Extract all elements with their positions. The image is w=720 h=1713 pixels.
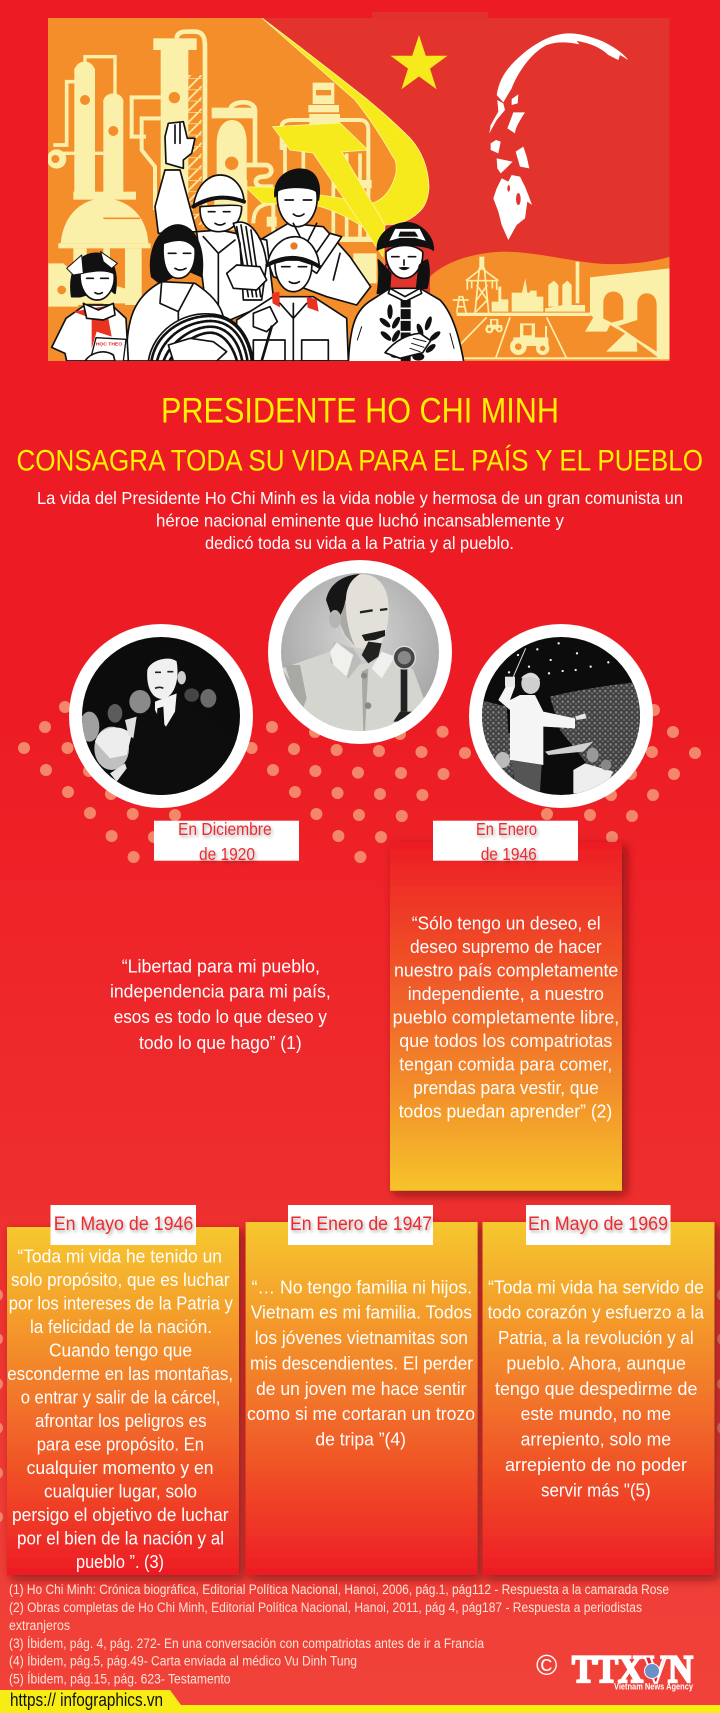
quote 3: persigo el objetivo de luchar <box>12 1505 229 1525</box>
quote 3: pueblo ”. (3) <box>76 1552 164 1572</box>
label: May 1946 <box>50 1205 196 1245</box>
title: PRESIDENTE HO CHI MINH <box>161 392 559 431</box>
quote 5: arrepiento, solo me <box>521 1429 671 1450</box>
quote 5 <box>488 1276 705 1500</box>
quote 4: de tripa ”(4) <box>315 1429 406 1450</box>
quote 2: tengan comida para comer, <box>399 1054 612 1074</box>
logo: TTXVN: Vietnam News Agency <box>614 1682 693 1692</box>
label: December 1920: En Diciembre <box>178 819 272 839</box>
quote 4: “… No tengo familia ni hijos. <box>252 1276 472 1297</box>
logo: TTXVN: TTXVN <box>572 1648 693 1691</box>
star <box>390 35 448 89</box>
book label: HỌC THEO <box>96 341 122 347</box>
quote 5: arrepiento de no poder <box>505 1454 687 1475</box>
label: December 1920 <box>154 819 299 864</box>
hero illustration <box>47 18 670 365</box>
quote 3: la felicidad de la nación. <box>30 1317 212 1337</box>
quote 3: cualquier momento y en <box>27 1458 213 1478</box>
quote 1 <box>110 957 331 1053</box>
young man <box>260 223 371 305</box>
group of people <box>52 122 371 361</box>
label: January 1946: En Enero <box>476 819 537 839</box>
panel: May 1969 <box>482 1205 714 1575</box>
quote 2: todos puedan aprender” (2) <box>399 1101 612 1121</box>
quote 2: deseo supremo de hacer <box>410 937 602 957</box>
quote 3: Cuando tengo que <box>49 1341 192 1361</box>
label: May 1946: En Mayo de 1946 <box>54 1213 193 1235</box>
quote 3: cualquier lugar, solo <box>44 1482 197 1502</box>
quote 5: este mundo, no me <box>521 1403 671 1424</box>
intro text <box>37 488 683 553</box>
label: January 1946 <box>433 819 578 864</box>
quote 1: “Libertad para mi pueblo, <box>122 957 320 977</box>
factories left <box>47 32 377 307</box>
quote 3: afrontar los peligros es <box>35 1411 207 1431</box>
label: May 1969 <box>526 1205 670 1245</box>
quote 2: “Sólo tengo un deseo, el <box>412 913 601 933</box>
worker arm and hand <box>155 170 197 233</box>
quote 4: como si me cortaran un trozo <box>247 1403 475 1424</box>
logo: TTXVN: © <box>536 1650 557 1682</box>
intro text: héroe nacional eminente que luchó incansablemente y <box>156 511 564 531</box>
quote 3: “Toda mi vida he tenido un <box>17 1247 222 1267</box>
panel: May 1946 <box>7 1205 239 1575</box>
label: January 1946: de 1946 <box>481 844 537 864</box>
quote 4: Vietnam es mi familia. Todos <box>251 1302 472 1323</box>
photo: right portrait conducting <box>469 624 653 808</box>
rice sheaf <box>148 314 253 361</box>
label: May 1969: En Mayo de 1969 <box>528 1213 668 1235</box>
soldier <box>237 297 348 361</box>
footnotes: (2) Obras completas de Ho Chi Minh, Editorial Política Nacional, Hanoi, 2011, pág 4, pág187 - Respuesta a periodistas <box>9 1600 642 1615</box>
label: January 1947: En Enero de 1947 <box>290 1213 432 1235</box>
quote 1: todo lo que hago” (1) <box>139 1033 302 1053</box>
worker body <box>197 230 273 320</box>
quote 5: Patria, a la revolución y al <box>498 1327 694 1348</box>
red flag <box>262 18 670 300</box>
quote 5: todo corazón y esfuerzo a la <box>488 1302 705 1323</box>
quote 1: esos es todo lo que deseo y <box>114 1007 327 1027</box>
photo: left portrait 1920 <box>69 624 253 808</box>
panel: January 1946 <box>390 819 622 1191</box>
quote 2 <box>393 913 619 1121</box>
Ho Chi Minh silhouette <box>489 33 628 240</box>
intro text: dedicó toda su vida a la Patria y al pueblo. <box>205 533 514 553</box>
orange landscape with city <box>430 252 670 365</box>
quote 3: por el bien de la nación y al <box>17 1529 224 1549</box>
quote 3: por los intereses de la Patria y <box>9 1294 233 1314</box>
quote 2: independiente, a nuestro <box>408 984 604 1004</box>
quote 4 <box>247 1276 475 1450</box>
quote 4: mis descendientes. El perder <box>250 1352 473 1373</box>
quote 4: de un joven me hace sentir <box>256 1378 466 1399</box>
quote 5: tengo que despedirme de <box>495 1378 697 1399</box>
footer url: https:// infographics.vn <box>10 1689 163 1710</box>
quote 3: o entrar y salir de la cárcel, <box>21 1388 220 1408</box>
footnotes: extranjeros <box>9 1618 70 1633</box>
panel: January 1947 <box>246 1205 478 1575</box>
footnotes: (5) Íbidem, pág.15, pág. 623- Testamento <box>9 1672 230 1686</box>
footer band <box>0 1690 720 1713</box>
quote 4: los jóvenes vietnamitas son <box>255 1327 468 1348</box>
woman centre left <box>151 225 202 283</box>
quote 2: nuestro país completamente <box>394 960 618 980</box>
quote 3: solo propósito, que es luchar <box>11 1270 230 1290</box>
dot pattern <box>0 701 720 1523</box>
quote 3 <box>7 1247 233 1572</box>
hammer and sickle <box>246 18 429 257</box>
photo: centre portrait <box>268 560 452 744</box>
intro text: La vida del Presidente Ho Chi Minh es la vida noble y hermosa de un gran comunista un <box>37 488 683 508</box>
quote 2: prendas para vestir, que <box>413 1078 599 1098</box>
quote 5: servir más "(5) <box>541 1479 651 1500</box>
quote 5: pueblo. Ahora, aunque <box>506 1352 686 1373</box>
quote 3: esconderme en las montañas, <box>7 1364 233 1384</box>
label: December 1920: de 1920 <box>199 844 255 864</box>
label: January 1947 <box>288 1205 433 1245</box>
footnotes: (3) Íbidem, pág. 4, pág. 272- En una conversación con compatriotas antes de ir a Francia <box>9 1636 484 1651</box>
girl <box>71 253 116 297</box>
footnotes <box>9 1582 669 1686</box>
quote 2: que todos los compatriotas <box>399 1031 612 1051</box>
quote 1: independencia para mi país, <box>110 982 331 1002</box>
woman right <box>348 223 464 363</box>
quote 5: “Toda mi vida ha servido de <box>488 1276 704 1297</box>
footnotes: (4) Íbidem, pág.5, pág.49- Carta enviada al médico Vu Dinh Tung <box>9 1654 357 1668</box>
quote 2: pueblo completamente libre, <box>393 1007 619 1027</box>
hero top tab <box>372 12 488 18</box>
quote 3: para ese propósito. En <box>37 1435 204 1455</box>
